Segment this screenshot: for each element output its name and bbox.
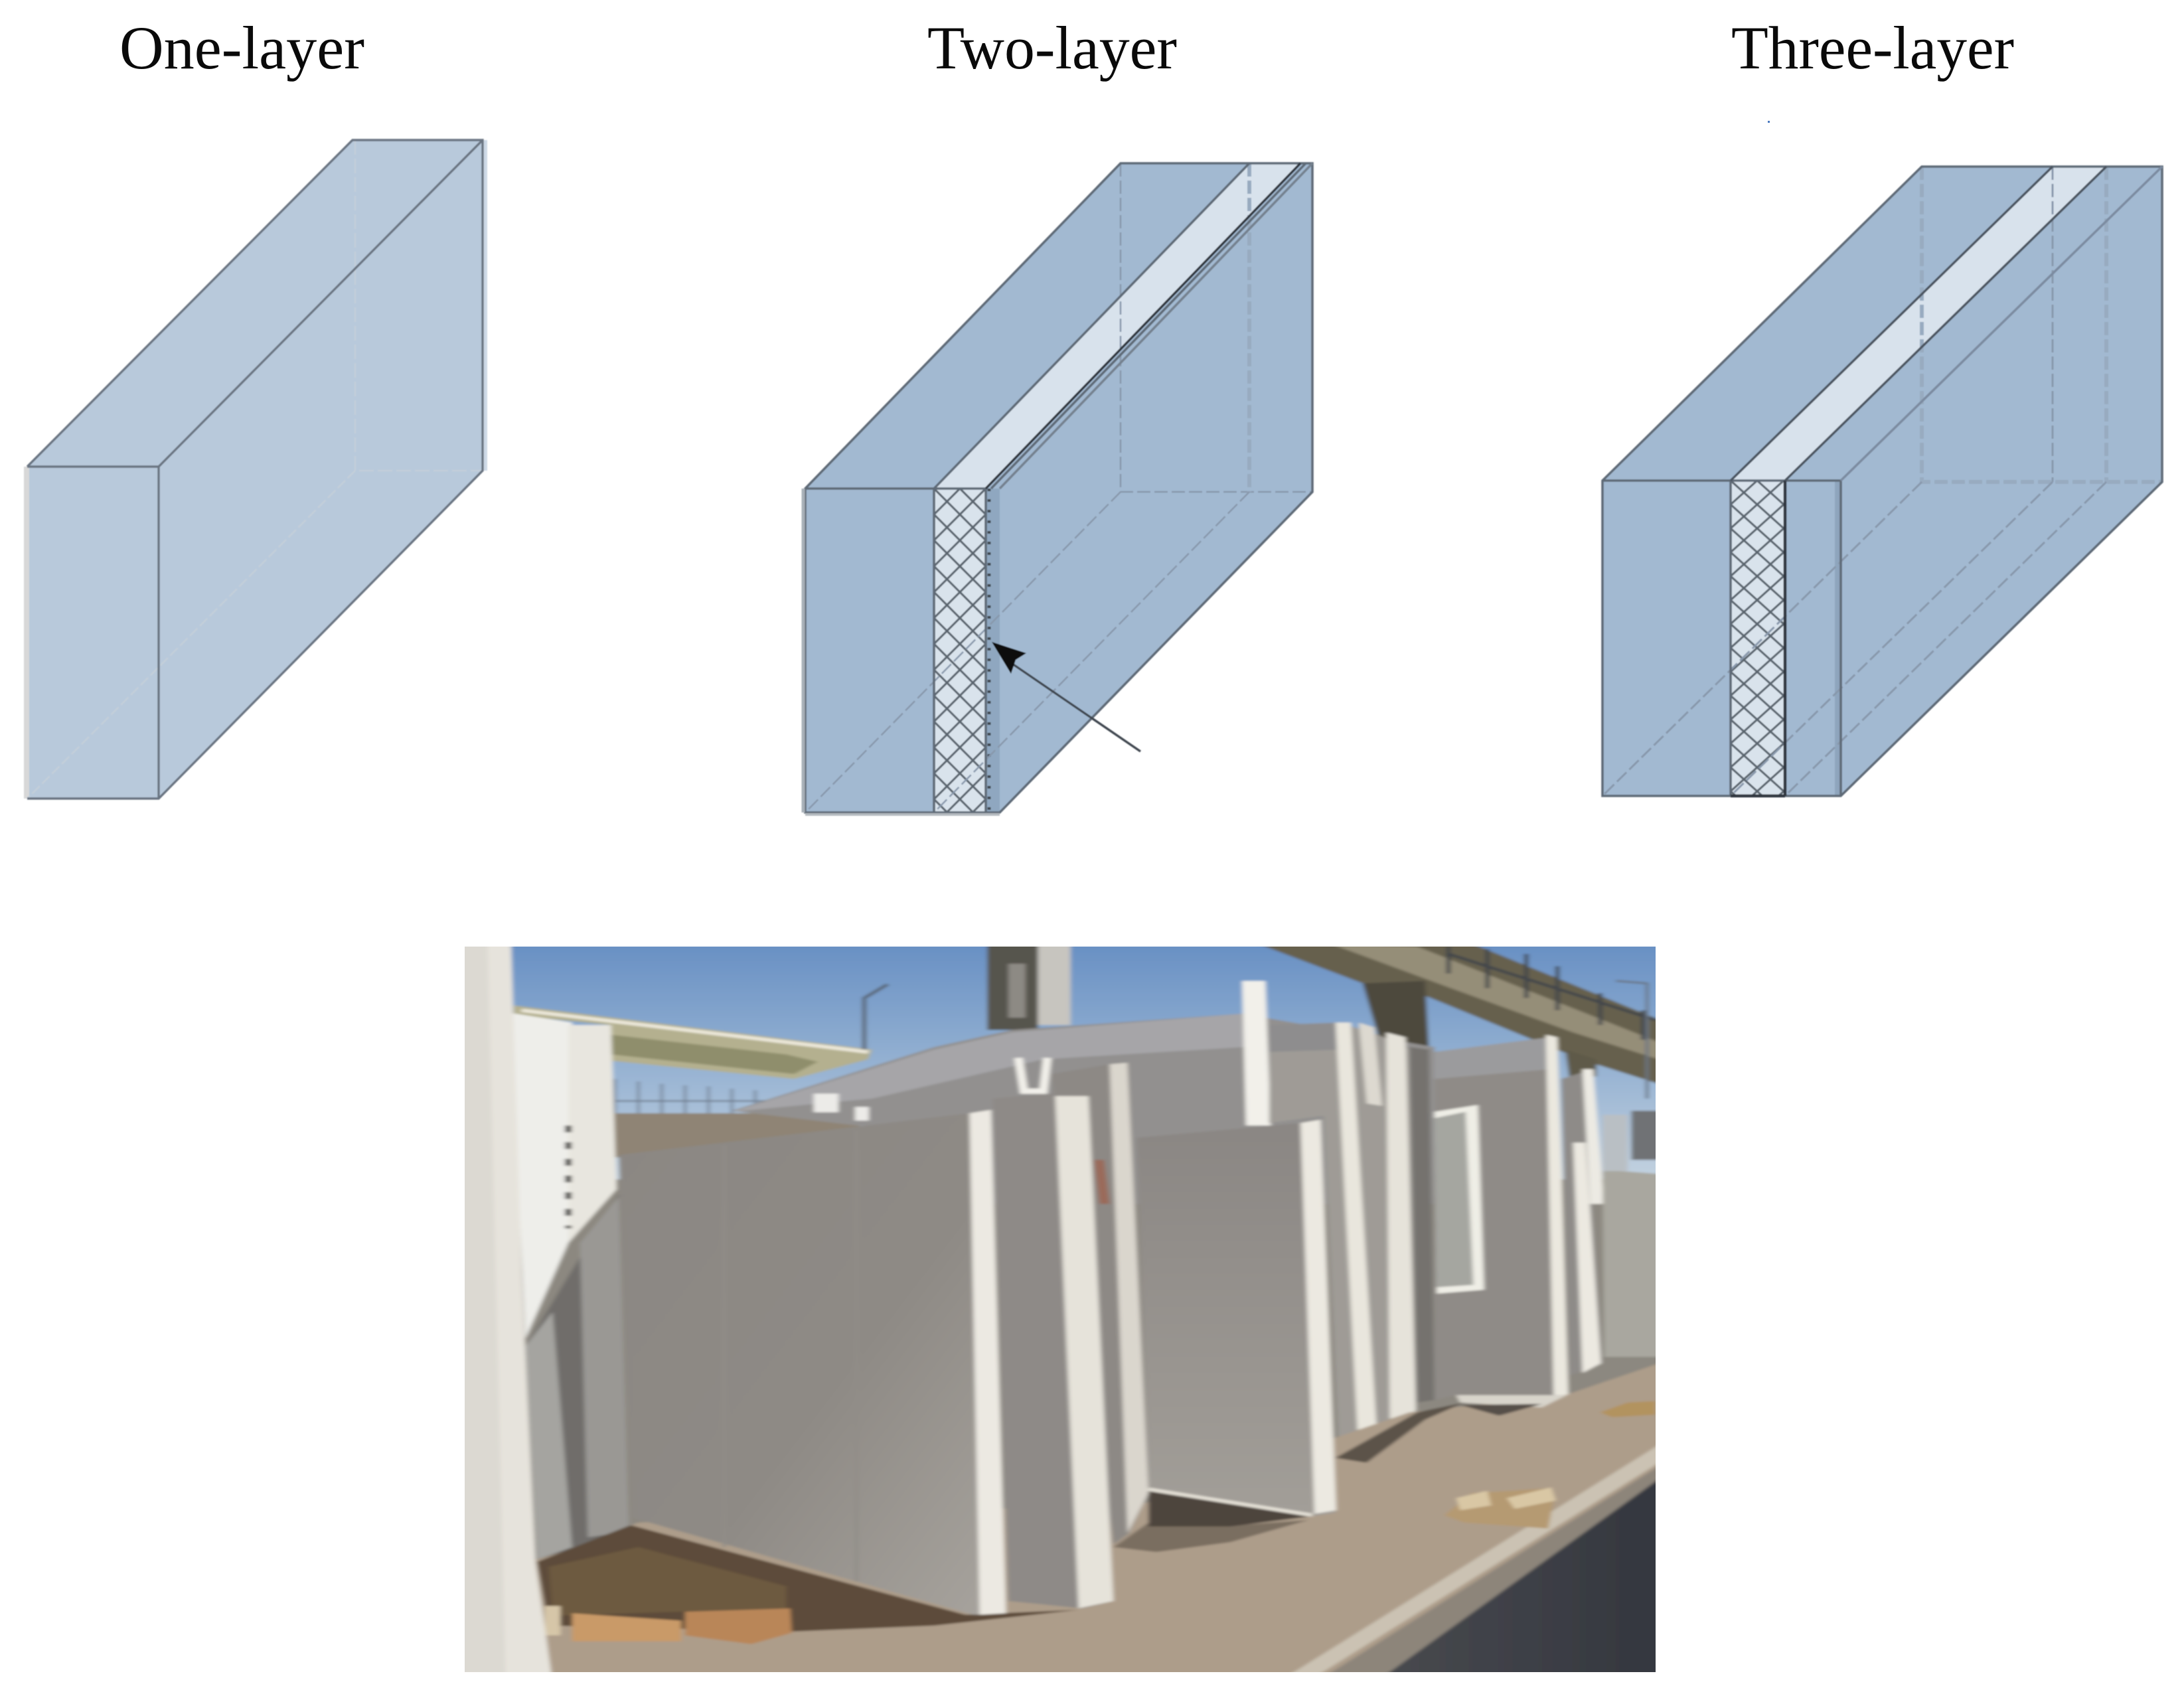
base fill behind the panels	[412, 905, 1737, 1698]
asphalt road	[1359, 1474, 1666, 1694]
insulation hatched front	[1731, 481, 1785, 796]
diagram: three-layer panel	[1602, 167, 2162, 796]
photo: precast concrete panels stored in a yard	[465, 947, 1656, 1672]
distant low building	[611, 1113, 860, 1158]
arrow	[992, 642, 1140, 751]
panel behind the big one	[993, 1094, 1113, 1608]
distant fence	[615, 1079, 779, 1113]
road edge stripe	[1296, 1449, 1666, 1679]
loops on top of panels	[1018, 1058, 1048, 1091]
insulation hatched front	[934, 489, 986, 812]
ground shadows	[1336, 1403, 1464, 1463]
elevated walkway	[1207, 925, 1666, 1086]
stray dot	[1768, 121, 1770, 123]
heading: Three-layer: Three-layer	[1731, 14, 2014, 82]
tower	[987, 925, 1038, 1030]
left pillar	[412, 905, 554, 1694]
heading: Two-layer: Two-layer	[927, 14, 1177, 82]
far panel with window	[1435, 1038, 1565, 1400]
diagram: two-layer panel	[803, 163, 1312, 814]
distant bridge	[514, 1006, 872, 1079]
bricks	[572, 1613, 681, 1641]
diagram: one-layer panel	[24, 140, 487, 799]
ground	[529, 1361, 1666, 1694]
back large panel	[732, 1014, 1435, 1204]
far right panels	[1561, 1071, 1602, 1375]
lamp post	[864, 984, 888, 1049]
right panels	[1269, 1022, 1417, 1461]
sky	[412, 905, 1737, 1180]
shadow on the ground	[537, 1525, 1079, 1632]
heading: One-layer: One-layer	[119, 14, 364, 82]
middle panel	[1137, 1120, 1336, 1516]
wooden blocks on the right	[1444, 1488, 1553, 1529]
insulation strip top face	[1731, 167, 2106, 481]
second panel rear edge	[1052, 1063, 1148, 1545]
big front panel	[619, 1111, 1004, 1615]
insulation strip top face	[934, 163, 1300, 489]
left white panels	[510, 1013, 572, 1339]
